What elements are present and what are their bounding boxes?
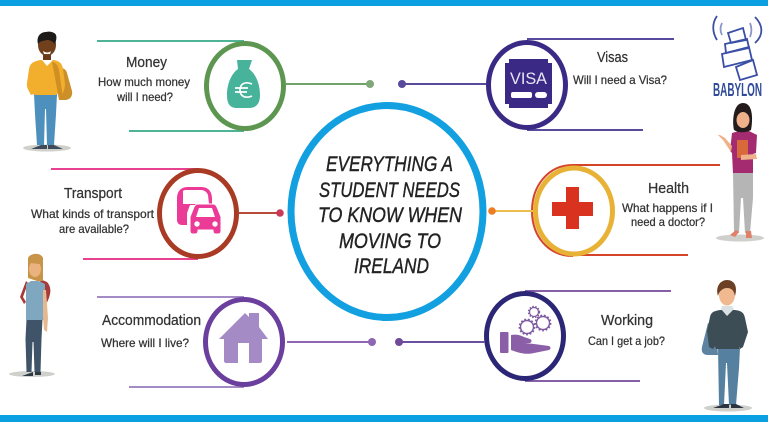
trousers xyxy=(34,94,57,145)
central title xyxy=(318,153,463,278)
icon: tower with signal arcs xyxy=(713,16,761,80)
central title: TO KNOW WHEN xyxy=(318,204,463,227)
accommodation text: Where will I live? xyxy=(101,336,189,350)
figure: woman with backpack xyxy=(9,254,55,377)
working text: Can I get a job? xyxy=(588,334,665,348)
bag xyxy=(702,323,718,355)
sweater xyxy=(707,310,748,349)
working text: Working xyxy=(601,313,653,329)
panel: working xyxy=(395,291,671,381)
central title: EVERYTHING A xyxy=(326,153,453,176)
arm xyxy=(43,290,48,332)
health text: What happens if I xyxy=(622,201,713,215)
panel: visas xyxy=(398,39,674,130)
icon: hand with gears xyxy=(500,306,550,354)
sweater xyxy=(27,60,65,95)
icon: bus and car xyxy=(177,187,221,234)
visas text: Will I need a Visa? xyxy=(573,73,667,87)
icon: money bag with euro xyxy=(227,60,260,108)
panel: money xyxy=(97,41,374,131)
icon: red cross xyxy=(552,187,593,229)
visas text xyxy=(573,50,667,87)
bottom bar xyxy=(0,415,768,422)
health text: need a doctor? xyxy=(631,215,705,229)
figure: woman with book xyxy=(716,103,764,242)
money text: Money xyxy=(126,55,168,71)
icon: visa card xyxy=(505,59,552,108)
central title circle xyxy=(291,106,483,318)
health text: Health xyxy=(648,181,689,197)
bag xyxy=(59,68,72,100)
icon: house xyxy=(219,313,268,363)
panel: transport xyxy=(31,169,284,259)
top bar xyxy=(0,0,768,6)
central title: STUDENT NEEDS xyxy=(319,179,460,202)
panel: health xyxy=(488,165,720,256)
icon: visa card: VISA xyxy=(510,70,547,88)
working text xyxy=(588,313,665,348)
figure: man with grey sweater xyxy=(702,280,752,412)
top xyxy=(26,281,45,320)
accommodation text xyxy=(101,313,201,350)
shoes xyxy=(31,145,63,149)
transport text: Transport xyxy=(64,186,122,202)
money text: will I need? xyxy=(116,90,173,104)
transport text: What kinds of transport xyxy=(31,207,155,221)
transport text xyxy=(31,186,155,236)
backpack xyxy=(40,279,50,305)
panel: accommodation xyxy=(97,297,376,387)
visas text: Visas xyxy=(597,50,628,66)
logo: Babylon xyxy=(713,16,762,100)
health text xyxy=(622,181,713,229)
transport text: are available? xyxy=(59,222,129,236)
central title: IRELAND xyxy=(354,255,429,278)
trousers xyxy=(718,348,740,405)
accommodation text: Accommodation xyxy=(102,313,201,329)
money text: How much money xyxy=(98,75,190,89)
money text xyxy=(98,55,190,104)
trousers xyxy=(26,319,42,372)
figure: man with yellow sweater xyxy=(23,32,72,152)
central title: MOVING TO xyxy=(339,230,441,253)
